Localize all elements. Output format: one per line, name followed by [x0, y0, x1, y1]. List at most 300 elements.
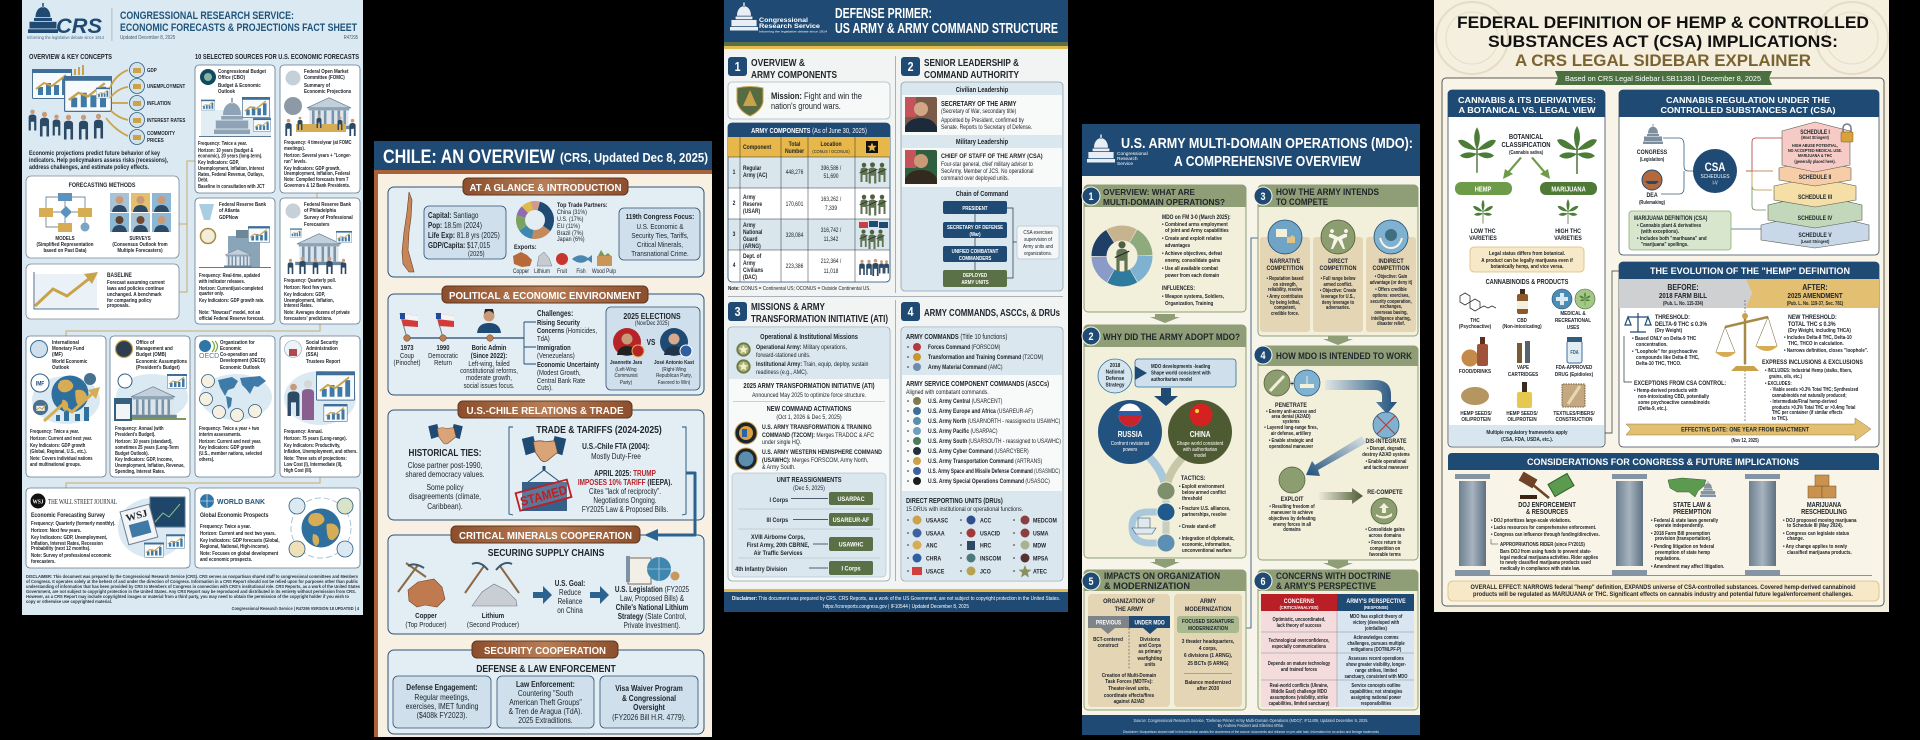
card: defense engagement: Regular meetings,	[414, 692, 470, 702]
card: OMB: Spending, Interest Rates.	[115, 469, 165, 474]
chart: chain of command: Chain of Command	[956, 191, 1008, 198]
table: army components: National	[743, 230, 763, 236]
text: trade partners: EU (11%)	[557, 224, 580, 230]
text: Congress: (Legislation)	[1640, 157, 1665, 162]
text: third product row: CONSTRUCTION	[1556, 417, 1593, 423]
card: IMF	[26, 336, 106, 477]
card: IMF: Outlook	[52, 365, 69, 371]
text: economic projections: indicators. Help policymakers assess risks (recessions),	[29, 158, 168, 164]
text: DOJ enforcement: • Congress can influence through funding/directives.	[1491, 532, 1600, 538]
text: new commands: COMMAND (T2COM): Merges TRADOC & AFC	[762, 433, 874, 439]
table: army components: 170,601	[786, 202, 803, 208]
card: Philadelphia Fed: Note: Averages dozens of private	[284, 310, 350, 315]
panel: leadership	[901, 82, 1063, 291]
panel: multi-domain operations	[1082, 124, 1420, 735]
card: visa waiver: Oversight	[633, 702, 665, 712]
panel: missions and ATI	[728, 327, 890, 581]
text: chief of staff: SecArmy. Member of JCS. No operational	[941, 169, 1034, 175]
footer banner: By Andrew Feickert and Ellerimo M'Ilai.	[1218, 723, 1284, 728]
text: exceptions: EXCEPTIONS FROM CSA CONTROL:	[1634, 381, 1726, 387]
text: US goal: Reduce	[559, 588, 581, 597]
list: ASCCs: U.S. Army Europe and Africa (USAREUR-AF)	[928, 409, 1033, 415]
title banner: Research	[1117, 156, 1138, 162]
text: Congress	[1637, 150, 1667, 162]
text: rescheduling: classified marijuana products.	[1787, 550, 1852, 556]
card: CBO: Unemployment, Inflation, Interest	[198, 166, 265, 171]
table: concerns vs perspective: and trained forces	[1281, 667, 1318, 672]
title: Updated December 8, 2025	[120, 35, 175, 41]
title banner: Congressional	[759, 17, 808, 24]
chart: baseline arrow	[34, 272, 99, 309]
card: SSA: Administration	[306, 346, 338, 352]
text: inclusions and exclusions: cannabinoids not naturally produced;	[1772, 393, 1847, 398]
card: CBO: Budget & Economic	[218, 83, 261, 89]
panel: Chile overview	[374, 141, 712, 737]
text: third product row	[1460, 411, 1595, 423]
text: mineral labels	[405, 613, 519, 629]
text: tactics: TACTICS:	[1181, 476, 1205, 482]
card: Wall Street Journal: Probability (next 12 months).	[31, 546, 91, 552]
card: Atlanta Fed: Federal Reserve Bank	[219, 202, 266, 208]
text: mineral labels: Lithium	[482, 613, 504, 620]
icon: CRS capitol logo	[27, 3, 105, 40]
text: schedules: (Least Stringent)	[1801, 239, 1830, 244]
text: timeline labels: (Pinochet)	[394, 360, 420, 367]
table: concerns vs perspective: Acknowledges comms	[1354, 635, 1399, 640]
text: missions: Operational & Institutional Missions	[760, 334, 858, 341]
footer banner	[1082, 715, 1420, 735]
table: concerns vs perspective: capabilities; not strategies	[1350, 689, 1403, 694]
stat box: Life Exp: 81.8 yrs (2025)	[428, 231, 500, 240]
list: DRUs: INSCOM	[980, 556, 1001, 563]
card: OMB: President's Budget).	[115, 432, 155, 437]
text: re-compete: RE-COMPETE	[1367, 490, 1403, 496]
card 2: why MDO: 2	[1089, 331, 1094, 343]
text: third product row: HEMP SEEDS/	[1460, 411, 1492, 417]
text: first product row: CBD	[1517, 318, 1527, 324]
text: indirect competition: advantage (or deny it)	[1370, 280, 1413, 285]
text: schedules: SCHEDULE IV	[1798, 216, 1832, 222]
text: timeline labels: 1990	[436, 345, 450, 352]
card: FOMC: Frequency: 4 times/year (at FOMC	[284, 140, 352, 145]
list: ASCCs: U.S. Army North (USARNORTH - reassigned to USAWHC)	[928, 419, 1060, 425]
section 3 heading: 3	[735, 304, 741, 319]
text: penetrate: PENETRATE	[1275, 403, 1307, 409]
text: timeline labels: (Since 2022):	[471, 353, 507, 360]
list: DRUs: JCO	[980, 569, 991, 576]
heading pill: AT A GLANCE & INTRODUCTION	[470, 182, 622, 194]
card: OECD: Economic Outlook	[220, 365, 260, 371]
callout: CSA supervision: supervision of	[1024, 237, 1052, 243]
card: SSA: Trustees Report	[306, 359, 341, 365]
text: re-compete	[1365, 490, 1405, 558]
card: World Bank: Frequency: Twice a year.	[200, 524, 252, 530]
text: penetrate: • Enemy anti-access and	[1266, 409, 1316, 415]
arrows to indicators	[106, 70, 128, 136]
chart: trade partners donut	[514, 199, 556, 241]
card: Philadelphia Fed: Unemployment, Inflation,	[284, 298, 334, 303]
card: World Bank: Horizon: Current and next two years.	[200, 531, 276, 537]
text: THC varieties: VARIETIES	[1554, 236, 1582, 242]
card: World Bank: and economic prospects.	[200, 557, 253, 563]
text: economic projections: address challenges, and estimate policy effects.	[29, 165, 149, 171]
card: Philadelphia Fed: Horizon: Next few years.	[284, 285, 333, 290]
panel: unit reassignments: (Dec 5, 2025)	[793, 486, 825, 492]
text: challenges: Immigration	[537, 345, 571, 352]
text: new commands: (USAWHC): Merges FORSCOM, Army North,	[762, 458, 869, 464]
card: SSA	[280, 336, 360, 477]
list: ASCCs: ARMY SERVICE COMPONENT COMMANDS (ASCCs)	[906, 381, 1049, 388]
text: MDO on FM 3-0: • Create and exploit relative	[1162, 236, 1222, 242]
card 6: concerns: 6	[1261, 576, 1266, 588]
card: OECD: Economic	[220, 346, 242, 352]
text: penetrate: air defense, artillery	[1271, 431, 1311, 437]
pills: hemp and marijuana: MARIJUANA	[1551, 186, 1586, 194]
panel: unit reassignments: I Corps	[841, 565, 861, 573]
card: FOMC: Economic Projections	[304, 89, 351, 95]
icons: second product row	[1462, 337, 1582, 366]
text: DEA: (Rulemaking)	[1639, 200, 1665, 205]
panel: unit reassignments: USAREUR-AF	[833, 517, 870, 524]
text: narrative competition: on strength,	[1273, 282, 1297, 287]
text: MDO on FM 3-0: of joint and Army capabilities	[1165, 228, 1229, 234]
text: THC varieties: LOW THC	[1471, 229, 1496, 235]
title: FEDERAL DEFINITION OF HEMP & CONTROLLED	[1457, 13, 1869, 32]
callout: MDO developments: Defense	[1106, 376, 1124, 382]
table: concerns vs perspective: (RESPONSE)	[1364, 605, 1389, 610]
text: schedules: SCHEDULE I	[1800, 130, 1830, 136]
card: Philadelphia Fed: Frequency: Quarterly poll.	[284, 278, 336, 283]
text: mineral labels: (Top Producer)	[405, 622, 447, 629]
table: army components: (CONUS / OCONUS)	[812, 149, 850, 154]
text: historical ties: Caribbean).	[427, 501, 463, 511]
text: narrative competition: competent,	[1274, 305, 1296, 310]
text: FTA	[582, 441, 650, 461]
text: direct competition: adversaries.	[1326, 305, 1350, 310]
text: exploit: • Resulting freedom of	[1269, 504, 1315, 510]
table: army components: 396,586 /	[821, 166, 842, 172]
mission callout	[728, 82, 890, 119]
text: inclusions and exclusions: to THC).	[1772, 416, 1788, 421]
card: OECD: interim assessments.	[199, 432, 241, 437]
card: IMF: World Economic	[52, 359, 88, 365]
table: army components: Civilians	[743, 268, 763, 274]
text: tactics	[1179, 476, 1235, 554]
section 3 heading: TRANSFORMATION INITIATIVE (ATI)	[751, 314, 888, 325]
circle: Russia: powers	[1123, 447, 1138, 453]
text: before threshold: THRESHOLD:	[1655, 315, 1690, 321]
card: OECD: Frequency: Twice a year + two	[199, 426, 259, 431]
text: MDO on FM 3-0: MDO on FM 3-0 (March 2025):	[1162, 215, 1231, 221]
card: Atlanta Fed: GDPNow	[219, 215, 238, 221]
text: narrative competition: credible force.	[1271, 311, 1299, 316]
card: World Bank: Note: Focuses on global development	[200, 551, 279, 557]
text: second product row: VAPE	[1517, 365, 1530, 371]
icons: tactics	[1132, 482, 1175, 552]
card 4: how MDO works	[1254, 346, 1418, 560]
callout: 2025 elections: (Right-Wing	[662, 367, 686, 373]
heading: defense and law enforcement: DEFENSE & LAW ENFORCEMENT	[476, 663, 616, 675]
text: challenges: (Venezuelans)	[537, 353, 575, 360]
text: timeline labels: Return	[434, 360, 452, 367]
table: army components: 328,084	[786, 233, 803, 239]
text: exploit	[1268, 497, 1316, 533]
title banner: Research Service	[759, 23, 820, 30]
card: OMB: Unemployment, Inflation, Revenue,	[115, 463, 185, 468]
text: inclusions and exclusions: - Intermediate/Final hemp-derived	[1770, 399, 1837, 404]
list: DRUs: MDW	[1033, 543, 1047, 550]
note: regulatory frameworks: (CSA, FDA, USDA, etc.).	[1501, 437, 1554, 443]
card: IMF: (Global, Regional, U.S., etc.).	[30, 449, 87, 454]
table: army components: 316,742 /	[821, 228, 842, 234]
panel: army modernization: 3 theater headquarters,	[1182, 639, 1235, 645]
card: OECD	[195, 336, 275, 477]
text: inclusions and exclusions	[1762, 360, 1863, 421]
footer banner: Source: Congressional Research Service, "Defense Primer: Army Multi-Domain Operations (MDO)", IF11409, Updated December 8, 2025.	[1133, 718, 1369, 723]
text: baseline: BASELINE	[107, 273, 132, 279]
callout: overall effect: products will be regulated as MARIJUANA or THC. Significant effects on cannabis industry and potential future legal/enforcement challenges.	[1473, 592, 1853, 598]
title	[112, 8, 359, 41]
card: IMF: Key Indicators: GDP growth	[30, 443, 86, 448]
list: DRUs: DIRECT REPORTING UNITS (DRUs)	[906, 498, 1003, 505]
text: schedules: (generally placed here).	[1794, 159, 1836, 164]
card: Atlanta Fed: with indicator releases.	[198, 279, 245, 284]
photo: secretary	[905, 97, 937, 132]
card: OECD: Organization for	[220, 340, 255, 346]
list: DRUs: USMA	[1033, 531, 1049, 538]
text: new threshold: TOTAL THC ≤ 0.3%	[1788, 322, 1836, 328]
icon: CBD bottle	[1517, 289, 1528, 314]
card 5: impacts	[1082, 570, 1246, 710]
table: concerns vs perspective: range strikes, limited	[1355, 668, 1397, 673]
comparison header: (Pub. L. No. 115-334)	[1663, 301, 1703, 306]
circle: China: CHINA	[1190, 429, 1211, 439]
card: Philadelphia Fed: Survey of Professional	[304, 215, 353, 221]
panel: evolution of hemp definition	[1619, 262, 1879, 447]
card: FOMC: Committee (FOMC)	[304, 75, 345, 81]
list: army commands: ARMY COMMANDS (Title 10 functions)	[906, 334, 1007, 341]
callout: CSA supervision: organizations.	[1024, 251, 1052, 257]
arrow: penetrate to dis-integrate	[1325, 380, 1397, 414]
icons: survey portraits	[110, 193, 171, 232]
card 5: impacts: 5	[1089, 576, 1094, 588]
indicator icons and labels: PRICES	[147, 138, 164, 144]
text: trade partners: Japan (6%)	[557, 237, 585, 243]
card: Wall Street Journal: Key Indicators: GDP, Unemployment,	[31, 535, 108, 541]
chart: chain of command: PRESIDENT	[962, 206, 988, 212]
text: April 2025 tariff: Cites "lack of reciprocity".	[589, 487, 661, 496]
text: tactics: partnerships, resolve	[1182, 512, 1227, 518]
callout: 119th Congress: U.S. Economic &	[637, 224, 684, 231]
text: disclaimer	[26, 574, 360, 604]
card 3: how the army competes: HOW THE ARMY INTENDS	[1276, 187, 1379, 197]
icon: small balance	[1625, 313, 1651, 332]
arrow	[1154, 388, 1178, 406]
text: trade partners	[557, 203, 608, 243]
text: tactics: • Create stand-off	[1179, 524, 1216, 530]
text: penetrate: area denial (A2/AD)	[1272, 414, 1311, 420]
arrow	[533, 586, 552, 604]
text: first product row: MEDICAL &	[1560, 311, 1586, 317]
text: state law: PREEMPTION	[1673, 509, 1711, 516]
text: schedules: HIGH ABUSE POTENTIAL,	[1792, 143, 1838, 148]
panel: organization of the army: against A2/AD	[1114, 699, 1145, 705]
circle: China	[1168, 400, 1232, 464]
text: DOJ enforcement: APPROPRIATIONS RIDER (since FY2015)	[1500, 542, 1585, 548]
text: historical ties	[405, 447, 485, 511]
text: exceptions	[1634, 381, 1726, 412]
title: CONGRESSIONAL RESEARCH SERVICE:	[120, 10, 294, 22]
footer banner	[724, 589, 1068, 612]
text: April 2025 tariff	[578, 469, 672, 514]
mission callout: nation's ground wars.	[771, 101, 841, 111]
heading: cannabinoids: CANNABINOIDS & PRODUCTS	[1486, 279, 1568, 286]
text: inclusions and exclusions: • EXCLUDES:	[1765, 381, 1792, 386]
text: tactics: • Fracture U.S. alliances,	[1179, 506, 1231, 512]
card: law enforcement	[497, 676, 594, 728]
text: challenges: TdA)	[537, 336, 550, 343]
text: timeline labels: Coup	[400, 353, 414, 360]
text: before threshold: DELTA-9 THC ≤ 0.3%	[1655, 322, 1708, 328]
text: mineral labels: Copper	[415, 613, 437, 620]
text: rescheduling: • Any change applies to newly	[1783, 544, 1847, 550]
card: World Bank: WORLD BANK	[217, 497, 266, 506]
card: Wall Street Journal	[26, 488, 190, 568]
table: concerns vs perspective: especially communications	[1272, 644, 1327, 649]
panel: army modernization: MODERNIZATION	[1185, 606, 1232, 613]
section: security cooperation	[388, 641, 704, 734]
section: political and economic environment	[388, 286, 704, 395]
text: models and surveys: MODELS	[55, 236, 75, 242]
text: MDO on FM 3-0: • Achieve objectives, defeat	[1162, 251, 1222, 257]
indicator icons and labels: UNEMPLOYMENT	[147, 84, 186, 90]
arrow	[1150, 314, 1180, 323]
list: DRUs: ANC	[926, 543, 938, 550]
title banner	[1082, 124, 1420, 176]
text: secretary: Appointed by President, confirmed by	[941, 118, 1024, 124]
title: (CRS, Updated Dec 8, 2025)	[560, 150, 708, 165]
card: IMF: and multinational groups.	[30, 462, 81, 467]
text: before threshold: • "Loophole" for psychoactive	[1632, 349, 1698, 355]
table: concerns vs perspective: Service concepts outline	[1351, 683, 1401, 688]
callout: 2025 elections	[606, 307, 700, 390]
text: indirect competition: intelligence sharing,	[1371, 316, 1411, 321]
panel: army modernization: 25 BCTs (5 ARNG)	[1188, 661, 1229, 667]
text: schedules: NO ACCEPTED MEDICAL USE.	[1788, 148, 1842, 153]
text: legislation: Private Investment).	[624, 621, 680, 630]
text: MDO on FM 3-0: advantages	[1165, 243, 1190, 249]
text: models and surveys: (Simplified Representation	[37, 242, 93, 248]
text: botanical classification: (Cannabis sativa)	[1509, 150, 1543, 155]
title banner: Service	[1117, 161, 1133, 167]
table: army components: Dept. of	[743, 254, 761, 260]
table: concerns vs perspective: Real-world conflicts (Ukraine,	[1270, 683, 1328, 688]
text: state law: regulations.	[1655, 556, 1681, 562]
card: defense engagement: exercises, IMET funding	[406, 701, 478, 711]
card: Atlanta Fed: Frequency: Real-time, updated	[199, 273, 260, 278]
text: chief of staff: CHIEF OF STAFF OF THE ARMY (CSA)	[941, 153, 1043, 160]
text: re-compete: competition on	[1370, 546, 1400, 552]
icon: lithium	[465, 563, 519, 606]
callout: CSA supervision	[1017, 226, 1059, 259]
table: concerns vs perspective: capabilities, limited sanctuary)	[1269, 701, 1330, 706]
card: Philadelphia Fed	[280, 198, 360, 324]
card: OECD: (U.S., member nations, selected	[199, 451, 262, 456]
table: army components: (USAR)	[743, 209, 760, 215]
card: IMF: (IMF)	[52, 352, 63, 358]
columns	[1260, 237, 1416, 332]
text: dis-integrate: DIS-INTEGRATE	[1365, 439, 1407, 445]
panel: unit reassignments: First Army, 20th CBRNE,	[747, 543, 810, 549]
text: schedules: (Most Stringent)	[1801, 135, 1829, 140]
callout: legal status: botanically hemp, and vice versa.	[1491, 264, 1564, 270]
table: army components: ARMY COMPONENTS (As of June 30, 2025)	[751, 128, 867, 135]
callout: MDO developments	[1098, 359, 1236, 393]
text: DOJ enforcement: to newly classified marijuana products used	[1500, 560, 1591, 566]
card: FOMC: Key Indicators: GDP growth,	[284, 166, 341, 171]
text: direct competition: • Objective: Create	[1320, 288, 1357, 293]
text: state law: • Amendment may affect litigation.	[1651, 564, 1725, 570]
text: ATI: 2025 ARMY TRANSFORMATION INITIATIVE (ATI)	[743, 383, 875, 390]
table: army components: (ARNG)	[743, 244, 761, 250]
callout: 2025 elections: Communist	[614, 373, 638, 379]
heading pill: U.S.-CHILE RELATIONS & TRADE	[466, 405, 624, 417]
text: secretary: SECRETARY OF THE ARMY	[941, 101, 1017, 108]
table: army components	[728, 123, 890, 282]
text: timeline labels: social issues focus.	[464, 383, 515, 390]
indicator icons and labels: INFLATION	[147, 101, 171, 107]
card: CBO	[195, 65, 275, 193]
card: Wall Street Journal: WSJ	[33, 499, 43, 506]
text: timeline labels	[394, 345, 518, 390]
text: historical ties: HISTORICAL TIES:	[409, 447, 481, 458]
card: visa waiver: & Congressional	[622, 693, 676, 703]
text: rescheduling: • Congress can legislate status	[1783, 531, 1850, 537]
text: inclusions and exclusions: THC per container (if similar effects	[1772, 410, 1843, 415]
text: challenges: Economic Uncertainty	[537, 362, 600, 369]
table: army components: 212,364 /	[821, 259, 842, 265]
chart: chain of command: ARMY UNITS	[961, 280, 989, 286]
panel: unit reassignments: XVIII Airborne Corps,	[751, 535, 805, 541]
text: botanical classification: CLASSIFICATION	[1501, 142, 1551, 149]
text: ATI: NEW COMMAND ACTIVATIONS	[767, 406, 852, 413]
callout: MDO developments: National	[1106, 369, 1125, 376]
list: DRUs: MPSA	[1033, 556, 1049, 563]
heading: trade and tariffs: TRADE & TARIFFS (2024-2025)	[536, 424, 662, 436]
card: Atlanta Fed: official Federal Reserve forecast.	[199, 316, 264, 321]
title: SUBSTANCES ACT (CSA) IMPLICATIONS:	[1488, 32, 1838, 51]
text: exploit: domains	[1283, 527, 1301, 533]
list: DRUs: USAASC	[926, 518, 949, 525]
connectors to CSA	[1661, 138, 1697, 194]
text: legislation: Law, Proposed Bills) &	[620, 594, 684, 603]
text: US goal: U.S. Goal:	[555, 579, 585, 588]
card: OMB: Frequency: Annual (with	[115, 426, 164, 431]
text: mineral labels: (Second Producer)	[467, 622, 519, 629]
circle: CSA schedules: I-V	[1712, 180, 1719, 186]
text: DEA	[1639, 193, 1665, 205]
circle: China: with authoritarian	[1183, 447, 1217, 453]
callout: CSA supervision: Army units and	[1023, 244, 1053, 250]
text: state law: • Pending litigation on federal	[1651, 544, 1715, 550]
text: state law: operate independently.	[1655, 523, 1704, 529]
card 1: overview: 1	[1089, 191, 1094, 203]
text: penetrate: • Layered long-range fires,	[1264, 425, 1318, 431]
list: DRUs: USACID	[980, 531, 1000, 538]
text: rescheduling	[1783, 502, 1857, 556]
callout: 119th Congress: Critical Minerals,	[637, 242, 683, 249]
card: visa waiver: Visa Waiver Program	[615, 683, 683, 693]
